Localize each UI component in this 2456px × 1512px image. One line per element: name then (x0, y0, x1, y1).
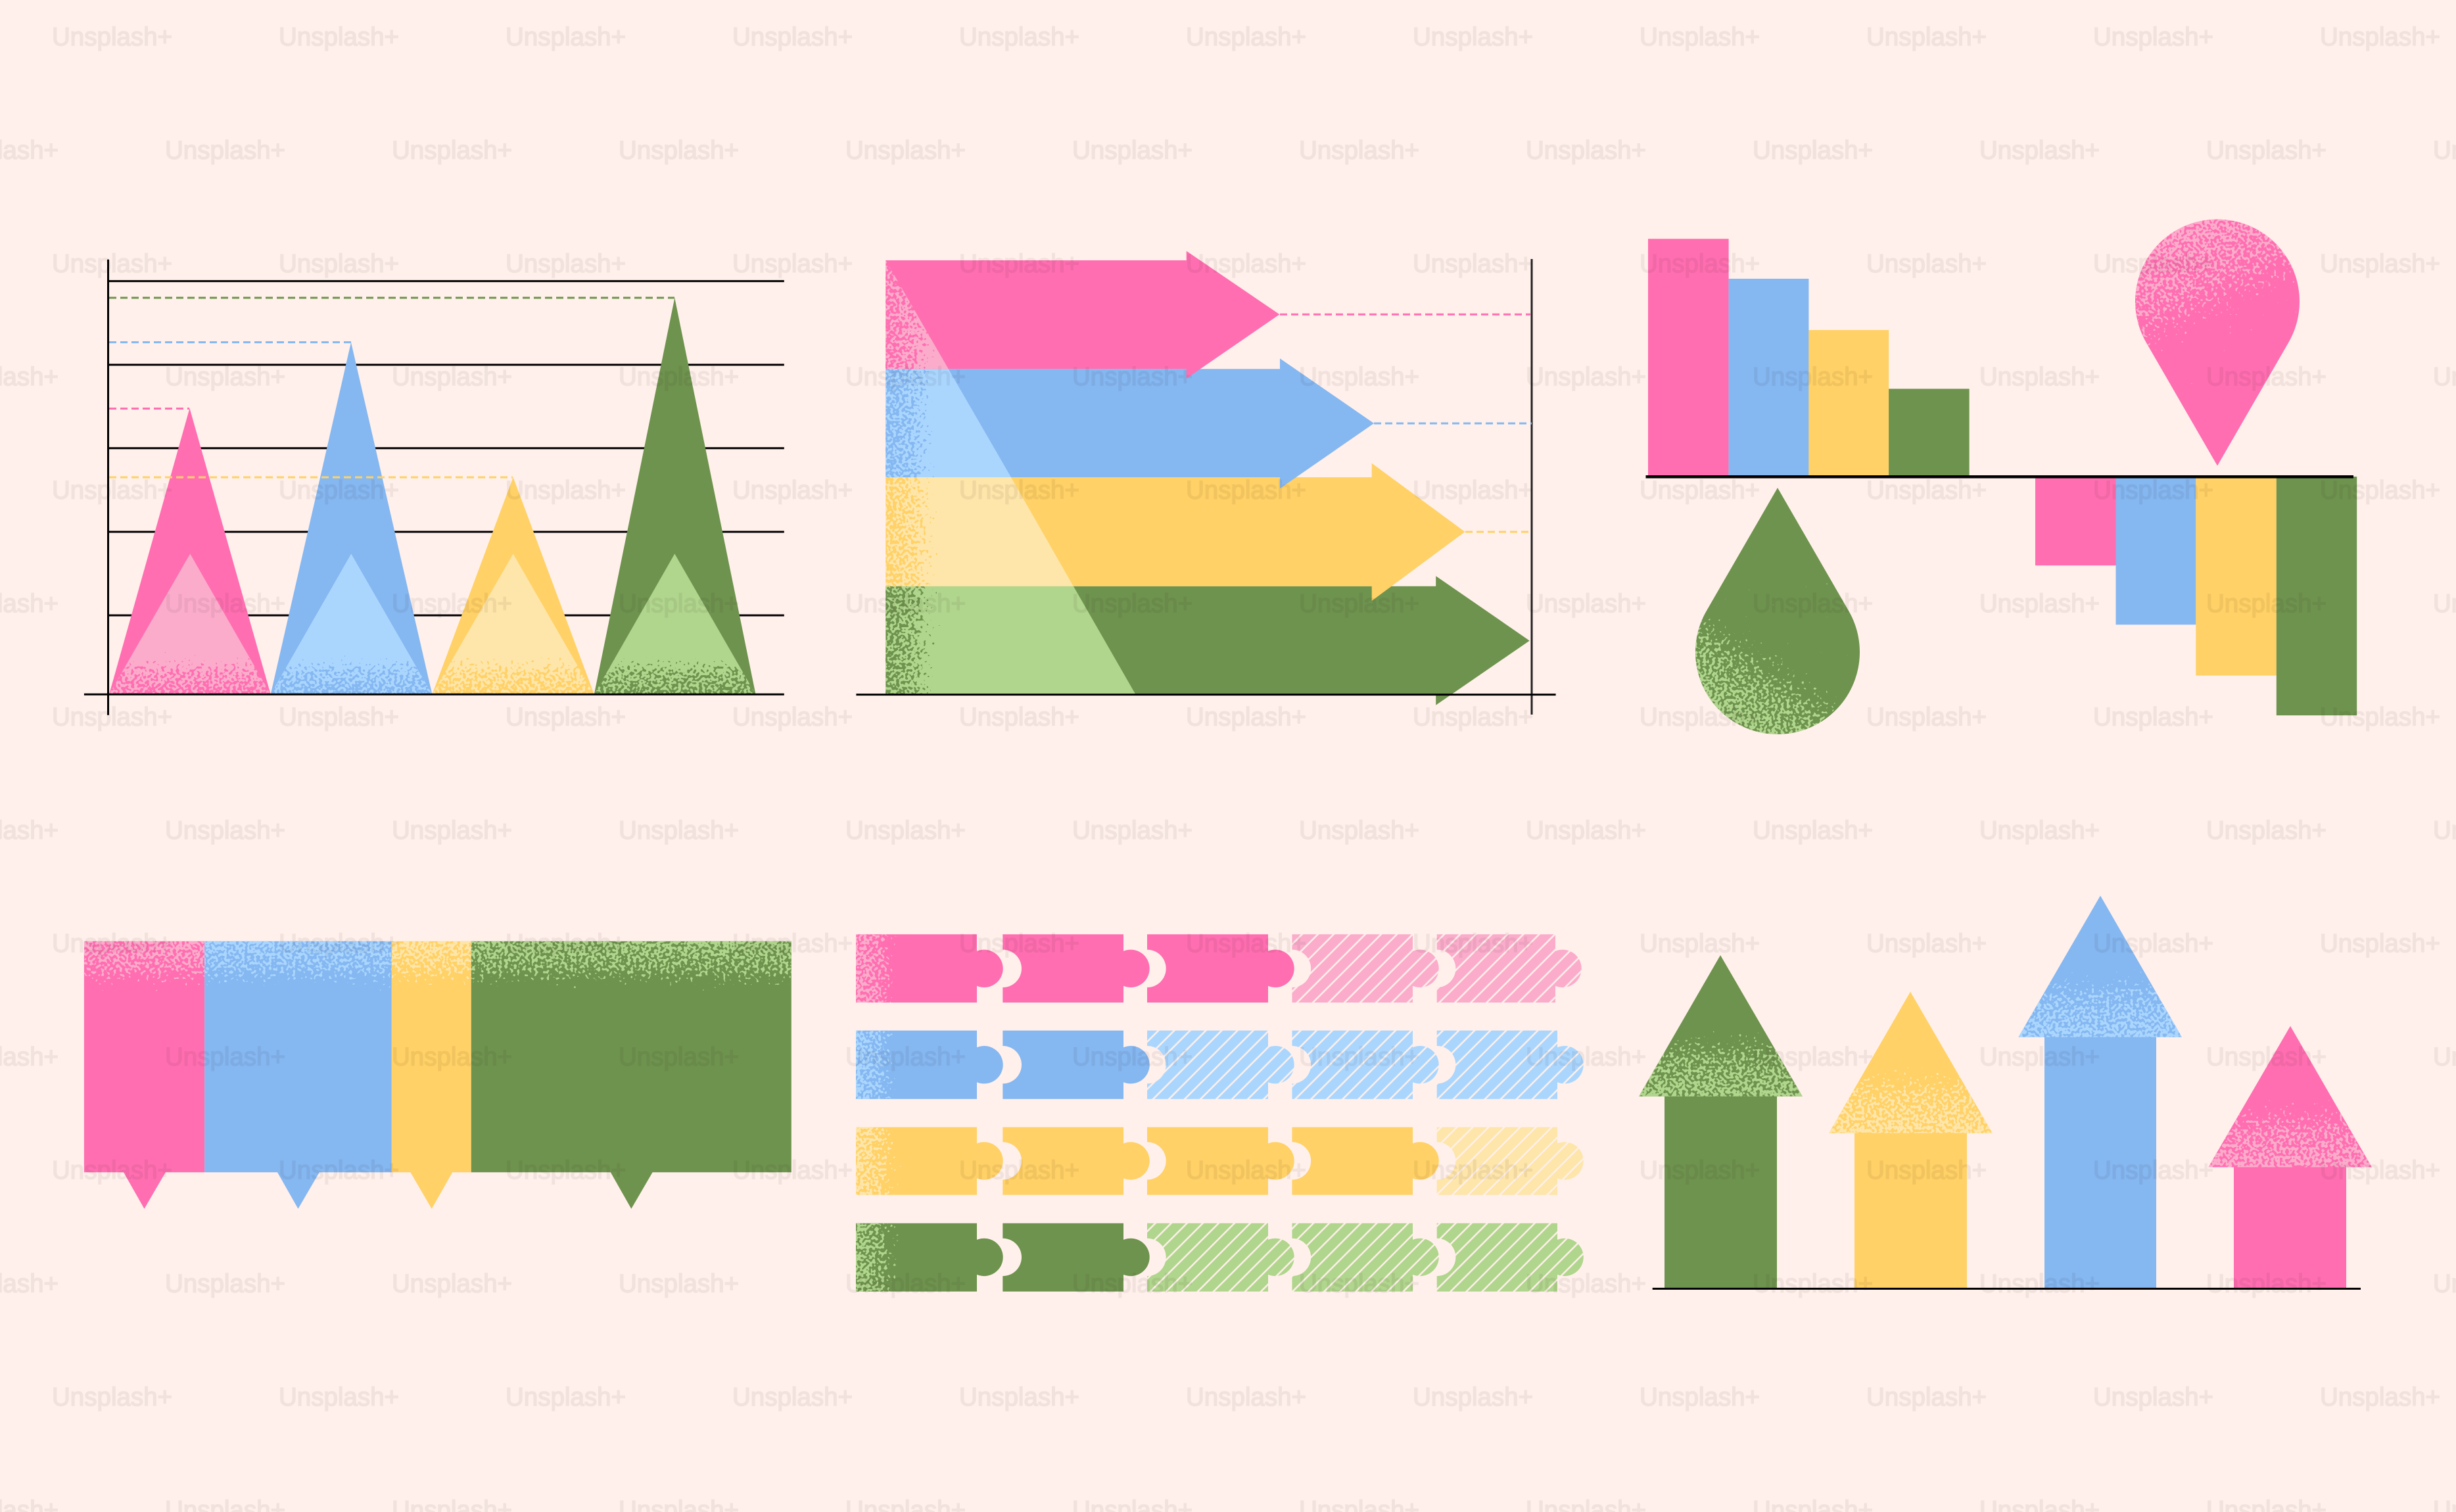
watermark: repeating Unsplash+ grid: Unsplash+ (392, 590, 512, 618)
watermark: repeating Unsplash+ grid: Unsplash+ (52, 1383, 172, 1411)
watermark: repeating Unsplash+ grid: Unsplash+ (279, 23, 399, 51)
watermark: repeating Unsplash+ grid: Unsplash+ (732, 1156, 853, 1185)
watermark: repeating Unsplash+ grid: Unsplash+ (1072, 816, 1193, 845)
watermark: repeating Unsplash+ grid: Unsplash+ (1413, 930, 1533, 958)
watermark: repeating Unsplash+ grid: Unsplash+ (1640, 930, 1760, 958)
watermark: repeating Unsplash+ grid: Unsplash+ (2093, 930, 2213, 958)
watermark: repeating Unsplash+ grid: Unsplash+ (732, 477, 853, 505)
watermark: repeating Unsplash+ grid: Unsplash+ (506, 477, 626, 505)
watermark: repeating Unsplash+ grid: Unsplash+ (506, 23, 626, 51)
watermark: repeating Unsplash+ grid: Unsplash+ (1186, 1383, 1306, 1411)
watermark: repeating Unsplash+ grid: Unsplash+ (392, 136, 512, 164)
bars above the axis (1648, 239, 1970, 477)
watermark: repeating Unsplash+ grid: Unsplash+ (2093, 250, 2213, 278)
puzzle row: blue (856, 1031, 1584, 1099)
watermark: repeating Unsplash+ grid: Unsplash+ (279, 1156, 399, 1185)
watermark: repeating Unsplash+ grid: Unsplash+ (506, 250, 626, 278)
watermark: repeating Unsplash+ grid: Unsplash+ (52, 477, 172, 505)
chart baseline (1653, 1288, 2361, 1290)
chart axis (1646, 475, 2353, 479)
watermark: repeating Unsplash+ grid: Unsplash+ (1526, 816, 1646, 845)
watermark: repeating Unsplash+ grid: Unsplash+ (1753, 816, 1873, 845)
watermark: repeating Unsplash+ grid: Unsplash+ (619, 1043, 739, 1072)
watermark: repeating Unsplash+ grid: Unsplash+ (1753, 136, 1873, 164)
watermark: repeating Unsplash+ grid: Unsplash+ (506, 1156, 626, 1185)
segment: green (471, 941, 791, 1209)
watermark: repeating Unsplash+ grid: Unsplash+ (165, 590, 285, 618)
watermark: repeating Unsplash+ grid: Unsplash+ (1413, 477, 1533, 505)
watermark: repeating Unsplash+ grid: Unsplash+ (1866, 250, 1987, 278)
segment: yellow (392, 941, 471, 1209)
triangle: yellow (432, 477, 594, 695)
watermark: repeating Unsplash+ grid: Unsplash+ (845, 1043, 966, 1072)
watermark: repeating Unsplash+ grid: Unsplash+ (845, 816, 966, 845)
watermark: repeating Unsplash+ grid: Unsplash+ (1299, 1043, 1419, 1072)
watermark: repeating Unsplash+ grid: Unsplash+ (2093, 1156, 2213, 1185)
watermark: repeating Unsplash+ grid: Unsplash+ (2093, 23, 2213, 51)
icon: pink map pin (2133, 217, 2302, 465)
watermark: repeating Unsplash+ grid: Unsplash+ (1186, 1156, 1306, 1185)
watermark: repeating Unsplash+ grid: Unsplash+ (1526, 1269, 1646, 1298)
panel: puzzle progress rows (856, 934, 1584, 1292)
arrow: yellow (886, 463, 1465, 601)
watermark: repeating Unsplash+ grid: Unsplash+ (619, 136, 739, 164)
watermark: repeating Unsplash+ grid: Unsplash+ (1072, 1043, 1193, 1072)
watermark: repeating Unsplash+ grid: Unsplash+ (1186, 477, 1306, 505)
arrow: blue (886, 358, 1374, 488)
arrow: pink (886, 251, 1279, 379)
right axis (1530, 259, 1533, 715)
arrow: green (1637, 955, 1804, 1288)
grid lines and axes (108, 260, 784, 715)
watermark: repeating Unsplash+ grid: Unsplash+ (1413, 250, 1533, 278)
triangle: pink (109, 408, 271, 695)
watermark: repeating Unsplash+ grid: Unsplash+ (1866, 1383, 1987, 1411)
watermark: repeating Unsplash+ grid: Unsplash+ (2320, 1156, 2440, 1185)
panel: horizontal arrow chart (856, 251, 1556, 715)
watermark: repeating Unsplash+ grid: Unsplash+ (1299, 590, 1419, 618)
panel: proportional callout bar (84, 941, 791, 1209)
watermark: repeating Unsplash+ grid: Unsplash+ (1299, 363, 1419, 391)
watermark: repeating Unsplash+ grid: Unsplash+ (845, 363, 966, 391)
watermark: repeating Unsplash+ grid: Unsplash+ (732, 930, 853, 958)
panel: triangle peak chart (84, 260, 784, 715)
watermark: repeating Unsplash+ grid: Unsplash+ (1979, 136, 2100, 164)
watermark: repeating Unsplash+ grid: Unsplash+ (959, 703, 1079, 731)
watermark: repeating Unsplash+ grid: Unsplash+ (392, 816, 512, 845)
watermark: repeating Unsplash+ grid: Unsplash+ (506, 930, 626, 958)
watermark: repeating Unsplash+ grid: Unsplash+ (279, 250, 399, 278)
watermark: repeating Unsplash+ grid: Unsplash+ (1640, 477, 1760, 505)
watermark: repeating Unsplash+ grid: Unsplash+ (1526, 136, 1646, 164)
watermark: repeating Unsplash+ grid: Unsplash+ (619, 1269, 739, 1298)
watermark: repeating Unsplash+ grid: Unsplash+ (959, 1156, 1079, 1185)
watermark: repeating Unsplash+ grid: Unsplash+ (2206, 816, 2326, 845)
watermark: repeating Unsplash+ grid: Unsplash+ (1640, 250, 1760, 278)
watermark: repeating Unsplash+ grid: Unsplash+ (732, 1383, 853, 1411)
watermark: repeating Unsplash+ grid: Unsplash+ (2320, 703, 2440, 731)
watermark: repeating Unsplash+ grid: Unsplash+ (845, 136, 966, 164)
icon: green water drop (1693, 488, 1862, 735)
watermark: repeating Unsplash+ grid: Unsplash+ (279, 477, 399, 505)
chart baseline (856, 694, 1556, 696)
puzzle row: green (856, 1223, 1584, 1292)
watermark: repeating Unsplash+ grid: Unsplash+ (1979, 816, 2100, 845)
segment: pink (84, 941, 204, 1209)
watermark: repeating Unsplash+ grid: Unsplash+ (1186, 23, 1306, 51)
watermark: repeating Unsplash+ grid: Unsplash+ (52, 1156, 172, 1185)
watermark: repeating Unsplash+ grid: Unsplash+ (279, 703, 399, 731)
watermark: repeating Unsplash+ grid: Unsplash+ (1413, 1383, 1533, 1411)
watermark: repeating Unsplash+ grid: Unsplash+ (165, 136, 285, 164)
watermark: repeating Unsplash+ grid: Unsplash+ (732, 250, 853, 278)
watermark: repeating Unsplash+ grid: Unsplash+ (1753, 1043, 1873, 1072)
watermark: repeating Unsplash+ grid: Unsplash+ (1072, 1269, 1193, 1298)
watermark: repeating Unsplash+ grid: Unsplash+ (52, 23, 172, 51)
watermark: repeating Unsplash+ grid: Unsplash+ (1866, 703, 1987, 731)
watermark: repeating Unsplash+ grid: Unsplash+ (959, 477, 1079, 505)
watermark: repeating Unsplash+ grid: Unsplash+ (959, 930, 1079, 958)
watermark: repeating Unsplash+ grid: Unsplash+ (1640, 703, 1760, 731)
watermark: repeating Unsplash+ grid: Unsplash+ (2206, 363, 2326, 391)
watermark: repeating Unsplash+ grid: Unsplash+ (52, 930, 172, 958)
bars below the axis (2035, 477, 2357, 715)
panel: upward arrow chart (1637, 895, 2374, 1288)
watermark: repeating Unsplash+ grid: Unsplash+ (279, 1383, 399, 1411)
watermark: repeating Unsplash+ grid: Unsplash+ (506, 1383, 626, 1411)
watermark: repeating Unsplash+ grid: Unsplash+ (392, 1043, 512, 1072)
watermark: repeating Unsplash+ grid: Unsplash+ (732, 703, 853, 731)
watermark: repeating Unsplash+ grid: Unsplash+ (1753, 1269, 1873, 1298)
watermark: repeating Unsplash+ grid: Unsplash+ (1413, 703, 1533, 731)
watermark: repeating Unsplash+ grid: Unsplash+ (2320, 477, 2440, 505)
watermark: repeating Unsplash+ grid: Unsplash+ (1072, 136, 1193, 164)
watermark: repeating Unsplash+ grid: Unsplash+ (165, 816, 285, 845)
arrow: green (886, 576, 1530, 705)
watermark: repeating Unsplash+ grid: Unsplash+ (1866, 930, 1987, 958)
watermark: repeating Unsplash+ grid: Unsplash+ (1979, 363, 2100, 391)
watermark: repeating Unsplash+ grid: Unsplash+ (1413, 1156, 1533, 1185)
watermark: repeating Unsplash+ grid: Unsplash+ (1979, 590, 2100, 618)
watermark: repeating Unsplash+ grid: Unsplash+ (1526, 1043, 1646, 1072)
peak guide lines (109, 298, 674, 477)
watermark: repeating Unsplash+ grid: Unsplash+ (165, 1269, 285, 1298)
watermark: repeating Unsplash+ grid: Unsplash+ (732, 23, 853, 51)
watermark: repeating Unsplash+ grid: Unsplash+ (1640, 1383, 1760, 1411)
watermark: repeating Unsplash+ grid: Unsplash+ (52, 703, 172, 731)
watermark: repeating Unsplash+ grid: Unsplash+ (1979, 1043, 2100, 1072)
watermark: repeating Unsplash+ grid: Unsplash+ (845, 1269, 966, 1298)
watermark: repeating Unsplash+ grid: Unsplash+ (2320, 250, 2440, 278)
watermark: repeating Unsplash+ grid: Unsplash+ (2093, 1383, 2213, 1411)
watermark: repeating Unsplash+ grid: Unsplash+ (2206, 1269, 2326, 1298)
watermark: repeating Unsplash+ grid: Unsplash+ (2093, 477, 2213, 505)
arrow: blue (2017, 895, 2184, 1288)
watermark: repeating Unsplash+ grid: Unsplash+ (845, 590, 966, 618)
watermark: repeating Unsplash+ grid: Unsplash+ (1753, 590, 1873, 618)
watermark: repeating Unsplash+ grid: Unsplash+ (1072, 590, 1193, 618)
watermark: repeating Unsplash+ grid: Unsplash+ (1186, 930, 1306, 958)
watermark: repeating Unsplash+ grid: Unsplash+ (2320, 23, 2440, 51)
watermark: repeating Unsplash+ grid: Unsplash+ (1640, 23, 1760, 51)
segment: blue (204, 941, 392, 1209)
watermark: repeating Unsplash+ grid: Unsplash+ (959, 1383, 1079, 1411)
watermark: repeating Unsplash+ grid: Unsplash+ (1640, 1156, 1760, 1185)
watermark: repeating Unsplash+ grid: Unsplash+ (959, 23, 1079, 51)
watermark: repeating Unsplash+ grid: Unsplash+ (1072, 363, 1193, 391)
arrow: yellow (1828, 992, 1995, 1288)
arrow guide lines (1280, 314, 1532, 532)
watermark: repeating Unsplash+ grid: Unsplash+ (1186, 250, 1306, 278)
watermark: repeating Unsplash+ grid: Unsplash+ (2206, 136, 2326, 164)
watermark: repeating Unsplash+ grid: Unsplash+ (1866, 1156, 1987, 1185)
puzzle row: yellow (856, 1127, 1584, 1195)
watermark: repeating Unsplash+ grid: Unsplash+ (1866, 23, 1987, 51)
watermark: repeating Unsplash+ grid: Unsplash+ (2320, 1383, 2440, 1411)
watermark: repeating Unsplash+ grid: Unsplash+ (392, 363, 512, 391)
watermark: repeating Unsplash+ grid: Unsplash+ (2206, 1043, 2326, 1072)
watermark: repeating Unsplash+ grid: Unsplash+ (2093, 703, 2213, 731)
watermark: repeating Unsplash+ grid: Unsplash+ (1299, 1269, 1419, 1298)
watermark: repeating Unsplash+ grid: Unsplash+ (165, 363, 285, 391)
watermark: repeating Unsplash+ grid: Unsplash+ (392, 1269, 512, 1298)
watermark: repeating Unsplash+ grid: Unsplash+ (619, 590, 739, 618)
puzzle row: pink (856, 934, 1582, 1003)
watermark: repeating Unsplash+ grid: Unsplash+ (279, 930, 399, 958)
watermark: repeating Unsplash+ grid: Unsplash+ (1299, 136, 1419, 164)
watermark: repeating Unsplash+ grid: Unsplash+ (1526, 590, 1646, 618)
watermark: repeating Unsplash+ grid: Unsplash+ (2320, 930, 2440, 958)
panel: diverging bars with pin and drop (1646, 217, 2357, 735)
watermark: repeating Unsplash+ grid: Unsplash+ (619, 363, 739, 391)
watermark: repeating Unsplash+ grid: Unsplash+ (1413, 23, 1533, 51)
watermark: repeating Unsplash+ grid: Unsplash+ (2206, 590, 2326, 618)
watermark: repeating Unsplash+ grid: Unsplash+ (1866, 477, 1987, 505)
watermark: repeating Unsplash+ grid: Unsplash+ (1753, 363, 1873, 391)
watermark: repeating Unsplash+ grid: Unsplash+ (1299, 816, 1419, 845)
watermark: repeating Unsplash+ grid: Unsplash+ (1979, 1269, 2100, 1298)
watermark: repeating Unsplash+ grid: Unsplash+ (959, 250, 1079, 278)
triangle: green (594, 298, 756, 695)
watermark: repeating Unsplash+ grid: Unsplash+ (165, 1043, 285, 1072)
watermark: repeating Unsplash+ grid: Unsplash+ (1186, 703, 1306, 731)
watermark: repeating Unsplash+ grid: Unsplash+ (1526, 363, 1646, 391)
arrow: pink (2207, 1026, 2374, 1288)
chart baseline (84, 694, 784, 696)
watermark: repeating Unsplash+ grid: Unsplash+ (619, 816, 739, 845)
watermark: repeating Unsplash+ grid: Unsplash+ (506, 703, 626, 731)
triangle: blue (270, 343, 433, 695)
watermark: repeating Unsplash+ grid: Unsplash+ (52, 250, 172, 278)
